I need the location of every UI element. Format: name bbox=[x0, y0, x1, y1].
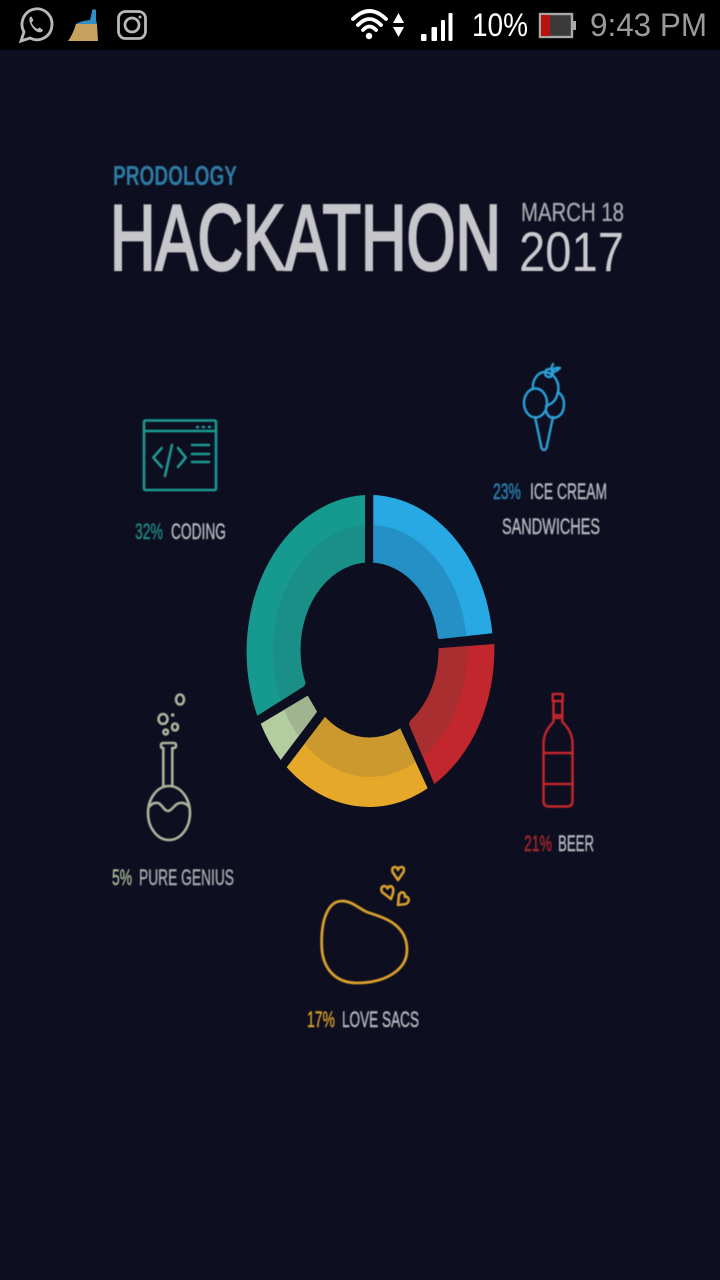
label: coding: 32% bbox=[135, 519, 163, 544]
donut chart bbox=[240, 485, 500, 815]
label: beer: 21% bbox=[524, 831, 552, 856]
icon: code window bbox=[144, 420, 216, 490]
status bar bbox=[0, 0, 720, 50]
year: 2017 bbox=[519, 220, 624, 283]
label: ice cream sandwiches bbox=[493, 479, 607, 539]
label: coding: CODING bbox=[171, 519, 226, 544]
label: beer: BEER bbox=[558, 831, 594, 856]
label: ice cream sandwiches: ICE CREAM bbox=[530, 479, 607, 504]
donut hole bbox=[300, 562, 438, 738]
date: MARCH 18 bbox=[521, 197, 624, 227]
slice: pure genius 5% bbox=[260, 696, 317, 760]
icon: wifi bbox=[353, 11, 386, 39]
heading: HACKATHON bbox=[110, 186, 501, 290]
icon: instagram bbox=[118, 12, 146, 38]
callout: pure genius bbox=[112, 694, 234, 890]
label: pure genius: 5% bbox=[112, 865, 132, 890]
label: pure genius bbox=[112, 865, 234, 890]
slice: ice cream 23% bbox=[373, 495, 492, 639]
label: ice cream sandwiches: 23% bbox=[493, 479, 521, 504]
callout: coding bbox=[135, 420, 226, 544]
callout: love sacs bbox=[307, 867, 419, 1032]
icon: hearts bbox=[381, 867, 409, 905]
label: pure genius: PURE GENIUS bbox=[139, 865, 234, 890]
icon: signal bars bbox=[421, 13, 452, 41]
slice: coding 32% bbox=[246, 495, 365, 716]
icon: flask with bubbles bbox=[148, 694, 190, 840]
icon: bean bag bbox=[322, 901, 407, 983]
callout: beer bbox=[524, 694, 594, 856]
slice: love sacs 17% bbox=[286, 717, 428, 807]
label: love sacs: 17% bbox=[307, 1007, 335, 1032]
icon: ice cream cone bbox=[524, 364, 564, 450]
label: coding bbox=[135, 519, 226, 544]
brand name: PRODOLOGY bbox=[113, 160, 237, 191]
slice: beer 21% bbox=[409, 644, 494, 784]
icon: beer bottle bbox=[544, 694, 572, 806]
battery percentage: 10% bbox=[472, 7, 528, 43]
label: love sacs bbox=[307, 1007, 419, 1032]
icon: battery bbox=[540, 14, 576, 37]
icon: broom bbox=[68, 9, 98, 41]
title block bbox=[110, 160, 624, 290]
icon: data arrows bbox=[393, 13, 404, 37]
clock: 9:43 PM bbox=[590, 7, 707, 43]
label: beer bbox=[524, 831, 594, 856]
callout: ice cream sandwiches bbox=[493, 364, 607, 539]
icon: whatsapp bbox=[21, 9, 52, 41]
label: ice cream sandwiches: SANDWICHES bbox=[502, 514, 600, 539]
label: love sacs: LOVE SACS bbox=[342, 1007, 419, 1032]
